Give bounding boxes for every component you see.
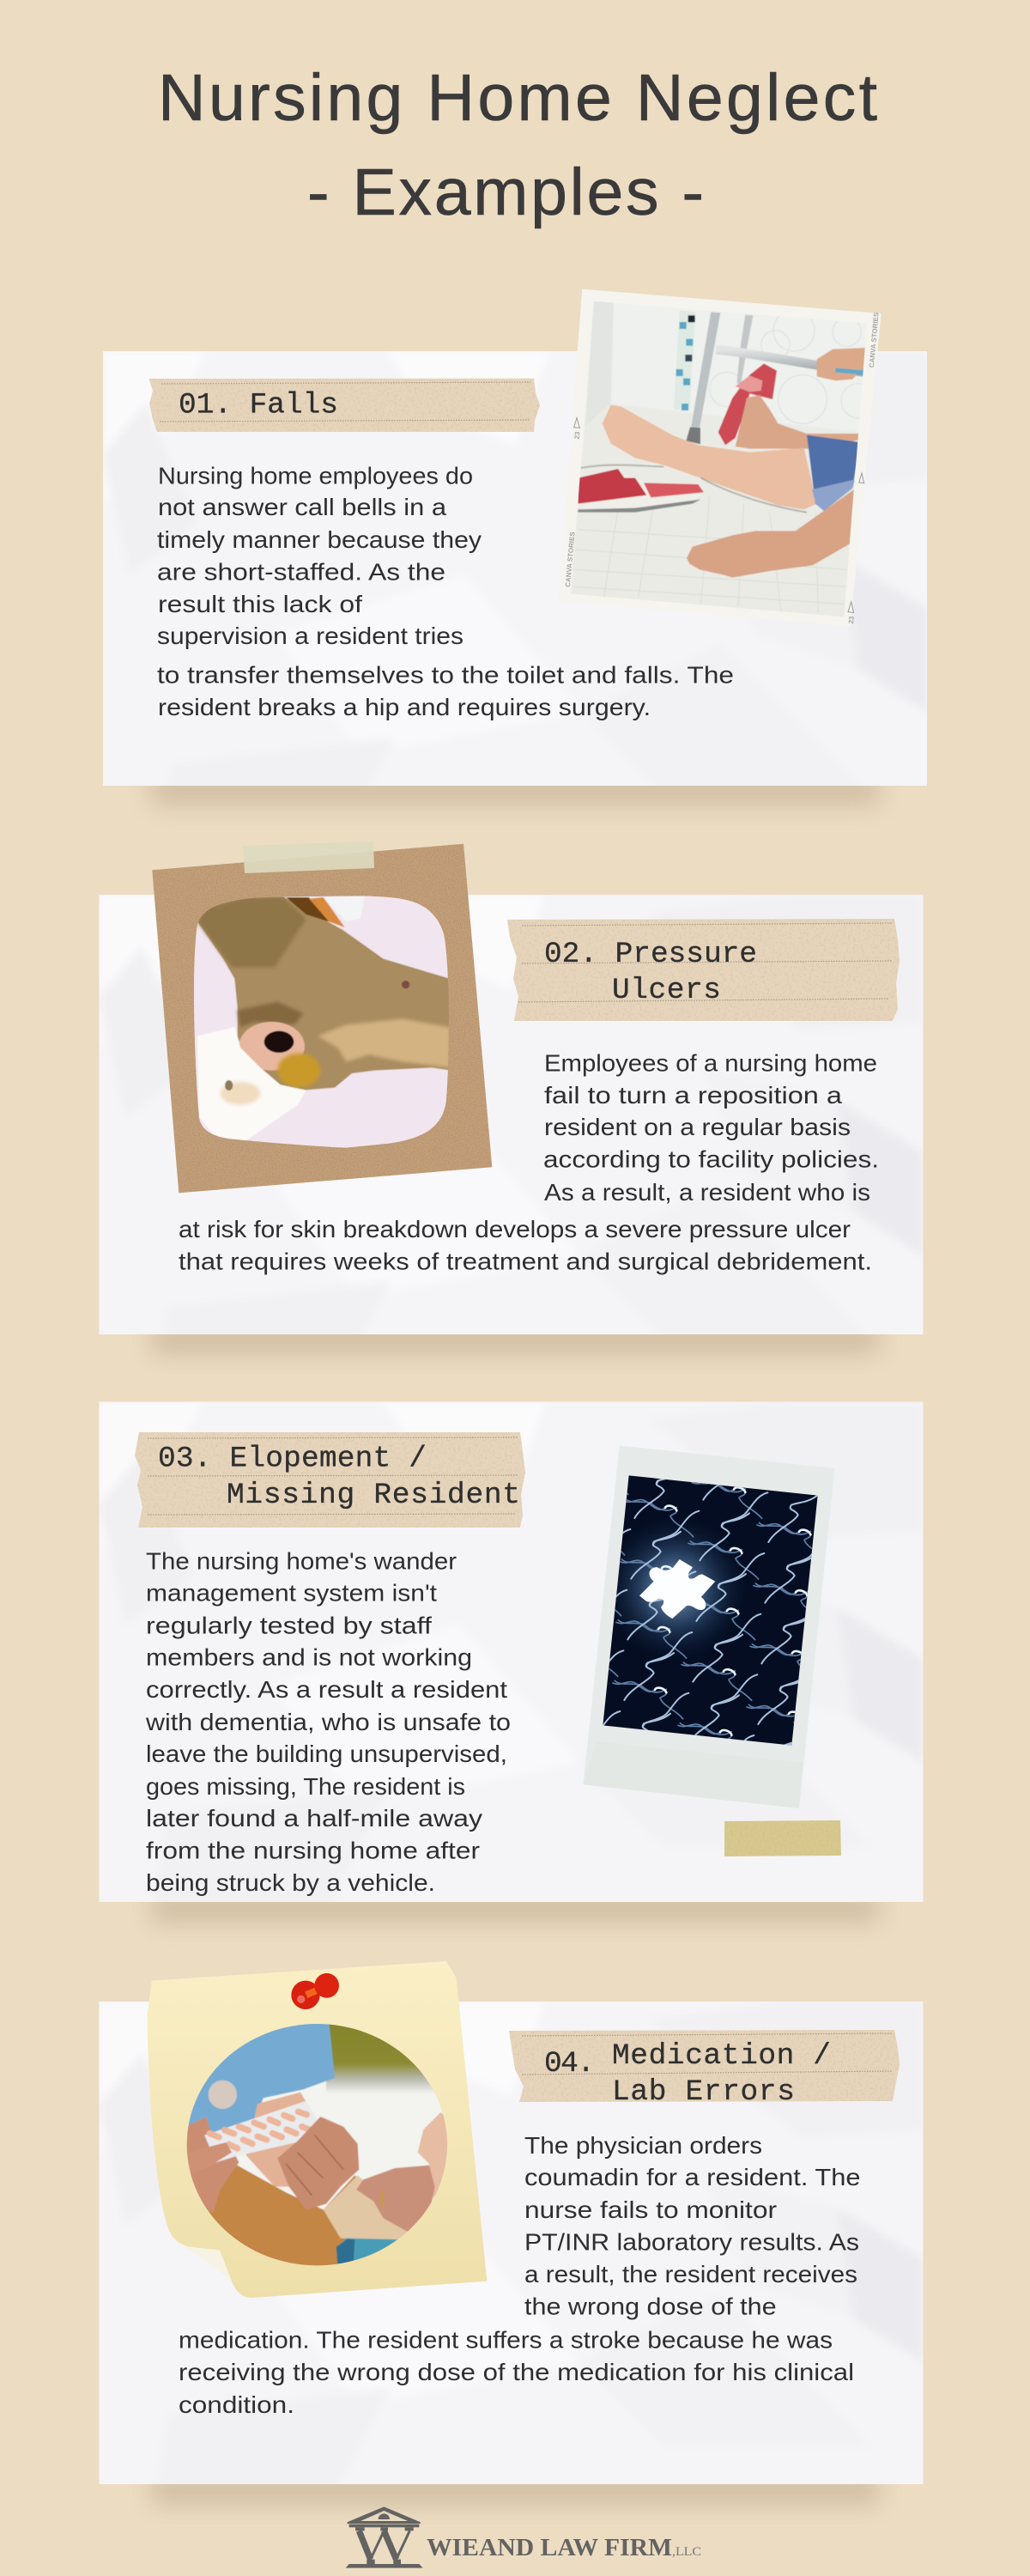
panel: 01 falls	[103, 289, 927, 866]
body text: pressure ulcers: resident on a regular basis	[544, 1114, 851, 1140]
body text: elopement: The nursing home's wander	[146, 1548, 457, 1575]
body text: medication errors: medication. The resident suffers a stroke because he was	[179, 2327, 833, 2353]
body text: medication errors: nurse fails to monitor	[524, 2196, 777, 2223]
body text: falls: timely manner because they	[157, 526, 482, 553]
body text: medication errors	[179, 2132, 860, 2418]
heading tape: 04 medication lab errors: 04.	[544, 2047, 595, 2081]
washi tape	[243, 841, 374, 873]
photo frame print marks	[564, 312, 881, 624]
heading tape: 04 medication lab errors: Medication /	[612, 2039, 831, 2073]
heading tape: 02 pressure ulcers: 02. Pressure	[544, 938, 757, 971]
title	[158, 61, 877, 229]
body text: elopement: later found a half-mile away	[146, 1805, 482, 1832]
body text: pressure ulcers: that requires weeks of treatment and surgical debridement.	[179, 1249, 872, 1275]
body text: elopement: correctly. As a result a resident	[146, 1676, 507, 1703]
sticky note with photo: medication blister pack	[148, 1961, 487, 2298]
heading tape: 02 pressure ulcers	[507, 919, 900, 1021]
body text: medication errors: receiving the wrong dose of the medication for his clinical	[179, 2359, 854, 2385]
logo: Wieand Law Firm	[346, 2506, 701, 2568]
body text: pressure ulcers: at risk for skin breakdown develops a severe pressure ulcer	[179, 1216, 851, 1242]
body text: elopement: with dementia, who is unsafe to	[145, 1709, 511, 1735]
body text: elopement: being struck by a vehicle.	[146, 1869, 435, 1896]
photo frame print marks: 23	[573, 431, 581, 440]
photo frame print marks: CANVA STORIES	[868, 312, 881, 368]
body text: elopement: goes missing, The resident is	[146, 1773, 465, 1800]
heading tape: 02 pressure ulcers: Ulcers	[612, 974, 721, 1007]
heading tape: 01 falls: 01. Falls	[179, 388, 338, 422]
panel: 03 elopement	[100, 1401, 924, 1929]
icon: courthouse columns	[346, 2506, 423, 2568]
photo frame print marks: 23	[847, 616, 856, 624]
heading tape: 03 elopement: Missing Resident	[227, 1479, 520, 1512]
body text: elopement	[145, 1548, 511, 1896]
heading tape: 04 medication lab errors	[509, 2030, 900, 2109]
body text: pressure ulcers	[179, 1050, 879, 1275]
heading tape: 04 medication lab errors: Lab Errors	[612, 2075, 795, 2109]
body text: medication errors: coumadin for a resident. The	[524, 2164, 860, 2190]
heading tape: 03 elopement: 03. Elopement /	[158, 1443, 427, 1475]
body text: medication errors: a result, the resident receives	[524, 2261, 857, 2287]
body text: falls: are short-staffed. As the	[157, 558, 445, 586]
body text: medication errors: The physician orders	[524, 2132, 762, 2159]
body text: elopement: regularly tested by staff	[146, 1613, 432, 1639]
heading tape: 01 falls	[149, 379, 540, 432]
photo: pressure ulcer on heel	[189, 893, 452, 1151]
body text: falls: resident breaks a hip and requires surgery.	[158, 694, 651, 720]
body text: pressure ulcers: according to facility policies.	[543, 1146, 879, 1173]
body text: elopement: leave the building unsupervised,	[146, 1741, 507, 1767]
body text: pressure ulcers: As a result, a resident who is	[544, 1179, 870, 1206]
title: Nursing Home Neglect	[158, 61, 877, 135]
body text: falls	[157, 462, 734, 720]
body text: medication errors: the wrong dose of the	[524, 2293, 777, 2320]
heading tape: 03 elopement	[135, 1432, 525, 1528]
body text: elopement: from the nursing home after	[146, 1838, 480, 1864]
title: - Examples -	[307, 155, 704, 229]
push pin	[291, 1973, 339, 2009]
body text: falls: supervision a resident tries	[157, 623, 464, 649]
body text: medication errors: PT/INR laboratory results. As	[524, 2229, 859, 2256]
panel: 02 pressure ulcers	[100, 841, 924, 1410]
body text: pressure ulcers: fail to turn a reposition a	[544, 1082, 842, 1109]
body text: falls: Nursing home employees do	[158, 462, 473, 489]
body text: falls: result this lack of	[158, 591, 362, 617]
body text: falls: to transfer themselves to the toilet and falls. The	[157, 661, 734, 689]
body text: falls: not answer call bells in a	[158, 494, 446, 520]
panel: 04 medication errors	[100, 1961, 924, 2517]
photo frame print marks: CANVA STORIES	[564, 531, 577, 587]
body text: elopement: management system isn't	[146, 1580, 437, 1606]
instant photo: missing puzzle piece	[584, 1446, 834, 1808]
photo: fall beside walker	[558, 289, 882, 626]
body text: medication errors: condition.	[179, 2391, 294, 2418]
cork photo frame	[152, 844, 492, 1193]
body text: elopement: members and is not working	[146, 1643, 472, 1671]
body text: pressure ulcers: Employees of a nursing home	[544, 1050, 877, 1077]
logo: Wieand Law Firm: WIEAND LAW FIRM	[427, 2534, 672, 2561]
masking tape	[724, 1820, 841, 1856]
logo: Wieand Law Firm: ,LLC	[672, 2545, 701, 2559]
